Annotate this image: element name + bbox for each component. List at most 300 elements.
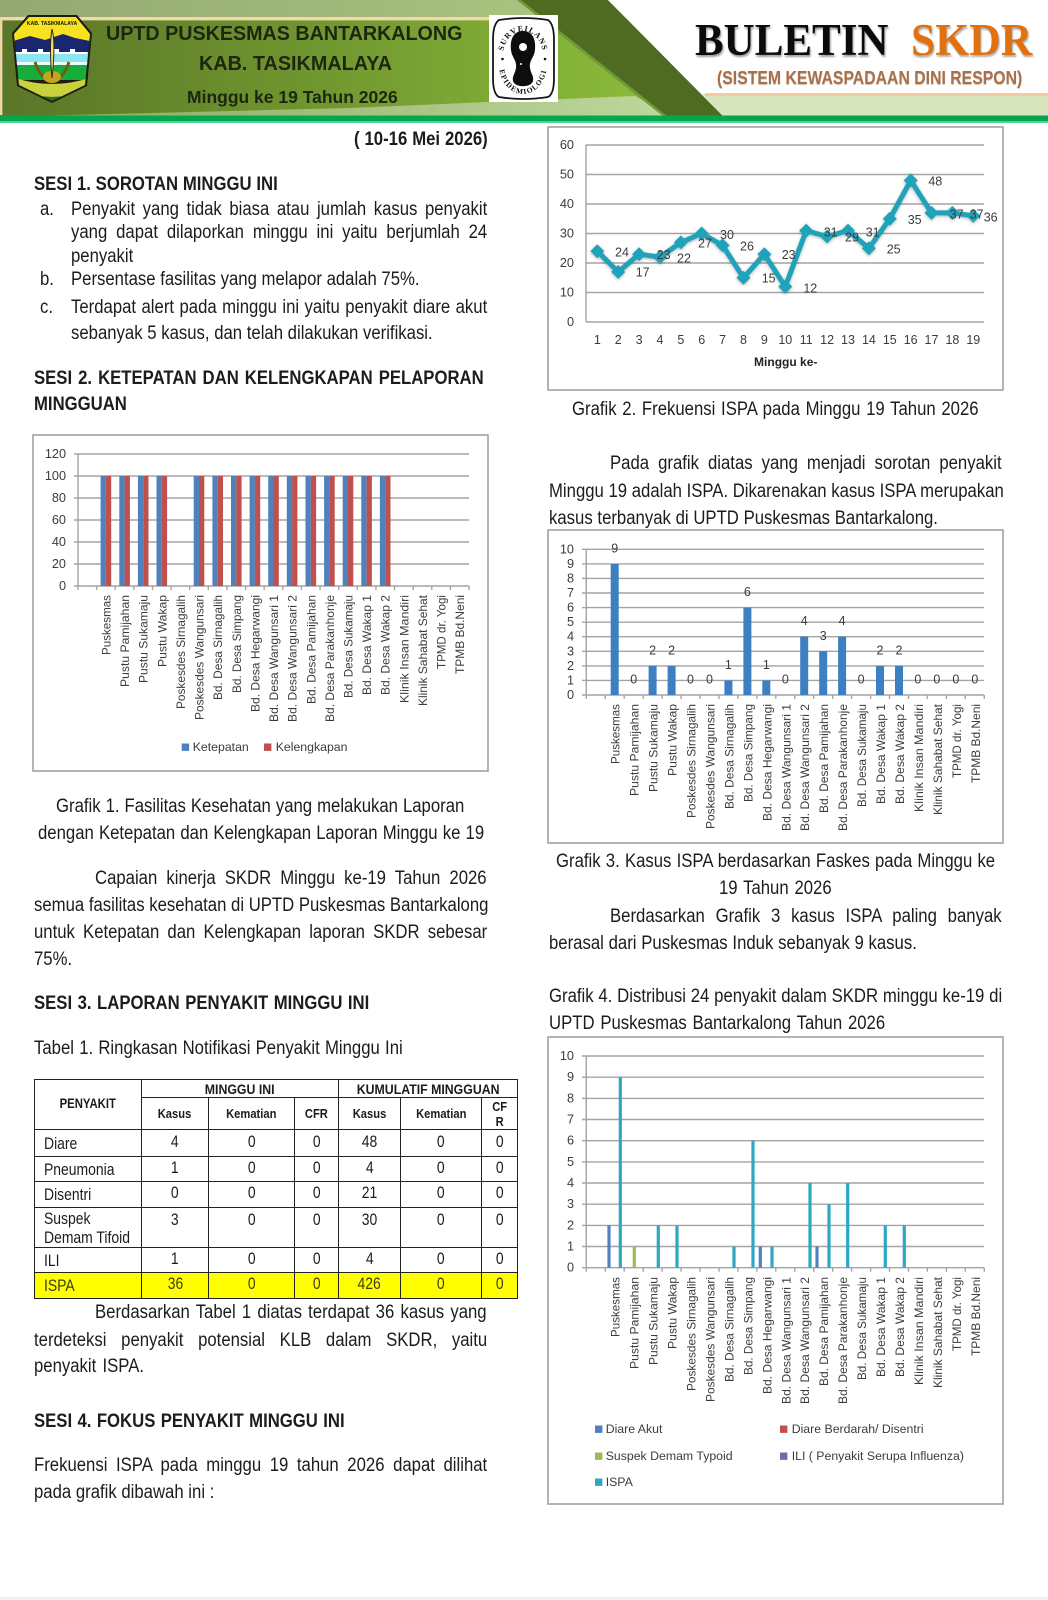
category labels: Pustu Sukamaju xyxy=(137,595,151,683)
data labels: 31 xyxy=(866,225,880,239)
category labels: Pustu Wakap xyxy=(155,595,169,667)
legend: ISPA xyxy=(606,1475,634,1489)
data labels: 0 xyxy=(858,672,865,686)
category labels: Bd. Desa Sukamaju xyxy=(855,704,869,807)
y axis labels: 10 xyxy=(560,1049,574,1063)
y axis labels: 1 xyxy=(567,673,574,687)
table: ringkasan notifikasi penyakit: 0 xyxy=(248,1248,255,1268)
caption: grafik 1 xyxy=(38,796,484,844)
caption: grafik 4: UPTD Puskesmas Bantarkalong Tahun 2026 xyxy=(549,1013,885,1034)
category labels: Puskesmas xyxy=(99,595,113,655)
chart: grafik 4 distribusi penyakit xyxy=(547,1036,1004,1505)
caption: grafik 3 xyxy=(556,851,995,899)
category labels: Klinik Insan Mandiri xyxy=(912,704,926,812)
text block: frekuensi ISPA xyxy=(34,1455,488,1503)
category labels: Bd. Desa Sirnagalih xyxy=(211,595,225,700)
x axis labels: 3 xyxy=(636,333,643,347)
table: ringkasan notifikasi penyakit: Kasus xyxy=(158,1106,192,1121)
table: ringkasan notifikasi penyakit: 0 xyxy=(248,1183,255,1202)
bars: diare akut xyxy=(607,1225,819,1268)
x axis labels: 2 xyxy=(615,333,622,347)
chart: grafik 1 ketepatan dan kelengkapan xyxy=(32,434,489,772)
category labels: Bd. Desa Parakanhonje xyxy=(836,704,850,831)
y axis labels: 60 xyxy=(560,138,574,152)
title: BULETIN SKDR: BULETIN xyxy=(695,15,888,65)
category labels: Bd. Desa Wakap 2 xyxy=(893,1277,907,1377)
caption: grafik 1: Grafik 1. Fasilitas Kesehatan yang melakukan Laporan xyxy=(56,796,464,817)
table: ringkasan notifikasi penyakit: 0 xyxy=(313,1158,320,1176)
category labels: Puskesmas xyxy=(609,1277,623,1337)
x axis labels: 7 xyxy=(719,333,726,347)
category labels: Pustu Wakap xyxy=(666,1277,680,1349)
title: BULETIN SKDR xyxy=(695,15,1034,65)
table: ringkasan notifikasi penyakit: 0 xyxy=(437,1132,445,1150)
y axis labels xyxy=(560,1049,574,1275)
heading: sesi 2 xyxy=(34,368,484,415)
category labels: Bd. Desa Wangunsari 2 xyxy=(286,595,300,722)
x axis labels: 1 xyxy=(594,333,601,347)
y axis labels: 6 xyxy=(567,1134,574,1148)
data labels: 0 xyxy=(933,672,940,686)
table: ringkasan notifikasi penyakit: 0 xyxy=(248,1132,255,1150)
text block: frekuensi ISPA: pada grafik dibawah ini : xyxy=(34,1482,214,1503)
table: ringkasan notifikasi penyakit: CF xyxy=(492,1098,507,1114)
line series xyxy=(597,180,973,287)
table: ringkasan notifikasi penyakit: Disentri xyxy=(44,1185,91,1204)
table: ringkasan notifikasi penyakit: 0 xyxy=(437,1183,445,1202)
data labels: 0 xyxy=(952,672,959,686)
category labels: Pustu Sukamaju xyxy=(647,1277,661,1365)
category labels: Bd. Desa Pamijahan xyxy=(304,595,318,704)
x axis labels: 18 xyxy=(945,333,959,347)
y axis labels: 120 xyxy=(45,447,66,461)
category labels: TPMB Bd.Neni xyxy=(969,704,983,783)
category labels: Klinik Sahabat Sehat xyxy=(931,1276,945,1388)
chart: grafik 3 kasus ISPA per faskes xyxy=(547,529,1004,844)
data labels: 0 xyxy=(971,672,978,686)
legend: Diare Berdarah/ Disentri xyxy=(792,1422,924,1436)
y axis labels: 10 xyxy=(560,542,574,556)
category labels: Klinik Sahabat Sehat xyxy=(416,594,430,706)
table: ringkasan notifikasi penyakit: KUMULATIF MINGGUAN xyxy=(357,1080,499,1096)
y axis labels: 7 xyxy=(567,586,574,600)
data labels: 27 xyxy=(698,236,712,250)
text block: sesi 1 list: yang dapat dilaporkan minggu ini yaitu berjumlah 24 xyxy=(71,222,487,243)
table: ringkasan notifikasi penyakit: 0 xyxy=(171,1183,179,1202)
category labels: Pustu Pamijahan xyxy=(628,1277,642,1369)
header title lines: KAB. TASIKMALAYA xyxy=(199,53,392,75)
table: ringkasan notifikasi penyakit: MINGGU INI xyxy=(205,1080,275,1096)
text block: sorotan ISPA: Minggu 19 adalah ISPA. Dikarenakan kasus ISPA merupakan xyxy=(549,481,1004,502)
data labels: 36 xyxy=(984,210,998,224)
header background shapes xyxy=(0,0,1048,123)
text block: sorotan ISPA: kasus terbanyak di UPTD Puskesmas Bantarkalong. xyxy=(549,508,938,529)
data labels: 2 xyxy=(877,643,884,657)
table: ringkasan notifikasi penyakit: 1 xyxy=(171,1158,179,1176)
table title: Tabel 1. Ringkasan Notifikasi Penyakit Minggu Ini xyxy=(34,1038,403,1059)
data labels: 15 xyxy=(762,272,776,286)
table: ringkasan notifikasi penyakit: 0 xyxy=(496,1132,503,1150)
category labels: Bd. Desa Wakap 1 xyxy=(360,595,374,695)
category labels: Bd. Desa Wangunsari 1 xyxy=(779,1277,793,1404)
data labels xyxy=(615,174,998,296)
data labels: 29 xyxy=(845,231,859,245)
bars: ISPA xyxy=(619,1077,906,1268)
logo: Surveilans Epidemiologi: EPIDEMIOLOGI xyxy=(499,68,546,94)
table: ringkasan notifikasi penyakit: Kasus xyxy=(353,1106,386,1121)
category labels: Bd. Desa Hegarwangi xyxy=(760,1277,774,1394)
text block: sesi 1 list: c. xyxy=(40,297,53,318)
text block: berdasarkan grafik 3: berasal dari Puskesmas Induk sebanyak 9 kasus. xyxy=(549,933,917,954)
subtitle: (SISTEM KEWASPADAAN DINI RESPON) xyxy=(717,68,1022,88)
legend: ILI ( Penyakit Serupa Influenza) xyxy=(792,1449,964,1463)
data labels: 37 xyxy=(970,207,984,221)
header title lines: Minggu ke 19 Tahun 2026 xyxy=(187,87,398,107)
y axis labels: 3 xyxy=(567,644,574,658)
data labels: 35 xyxy=(908,213,922,227)
category labels: Poskesdes Sirnagalih xyxy=(684,1277,698,1391)
data labels: 24 xyxy=(615,245,629,259)
x axis labels: 12 xyxy=(820,333,834,347)
table: ringkasan notifikasi penyakit: 0 xyxy=(496,1210,503,1229)
category labels: Bd. Desa Hegarwangi xyxy=(248,595,262,712)
category labels: Bd. Desa Sukamaju xyxy=(342,595,356,698)
table: ringkasan notifikasi penyakit: 0 xyxy=(437,1158,445,1176)
x axis labels xyxy=(594,333,980,347)
table: ringkasan notifikasi penyakit: Kematian xyxy=(416,1106,466,1121)
category labels: Bd. Desa Wangunsari 2 xyxy=(798,1277,812,1404)
category labels: Bd. Desa Simpang xyxy=(230,595,244,693)
y axis labels xyxy=(560,138,574,329)
category labels xyxy=(609,703,983,831)
data labels: 1 xyxy=(763,658,770,672)
table: ringkasan notifikasi penyakit: CFR xyxy=(305,1106,328,1121)
y axis labels: 100 xyxy=(45,469,66,483)
table: ringkasan notifikasi penyakit: 0 xyxy=(496,1158,503,1176)
text block: capaian kinerja xyxy=(34,868,488,970)
category labels: Bd. Desa Wakap 2 xyxy=(893,704,907,804)
table: ringkasan notifikasi penyakit: 0 xyxy=(248,1158,255,1176)
data labels: 1 xyxy=(725,658,732,672)
data labels: 2 xyxy=(649,643,656,657)
y axis labels: 8 xyxy=(567,571,574,585)
category labels: TPMD dr. Yogi xyxy=(435,595,449,669)
y axis labels: 30 xyxy=(560,226,574,240)
text block: capaian kinerja: 75%. xyxy=(34,949,72,970)
data labels: 6 xyxy=(744,585,751,599)
y axis labels: 40 xyxy=(560,197,574,211)
data labels: 31 xyxy=(824,225,838,239)
y axis labels: 60 xyxy=(52,513,66,527)
table: ringkasan notifikasi penyakit: 21 xyxy=(362,1183,377,1202)
caption: grafik 4: Grafik 4. Distribusi 24 penyakit dalam SKDR minggu ke-19 di xyxy=(549,986,1002,1007)
legend: Diare Akut xyxy=(606,1422,663,1436)
table: ringkasan notifikasi penyakit: Demam Tifoid xyxy=(44,1228,130,1246)
caption: grafik 3: Grafik 3. Kasus ISPA berdasarkan Faskes pada Minggu ke xyxy=(556,851,995,872)
logo: Surveilans Epidemiologi: SURVEILANS xyxy=(498,26,548,50)
heading: sesi 3: SESI 3. LAPORAN PENYAKIT MINGGU INI xyxy=(34,993,369,1014)
heading: sesi 2: SESI 2. KETEPATAN DAN KELENGKAPAN PELAPORAN xyxy=(34,368,484,389)
data labels: 0 xyxy=(782,672,789,686)
logo: Kabupaten Tasikmalaya shield xyxy=(12,15,92,103)
text block: sesi 1 list: Persentase fasilitas yang melapor adalah 75%. xyxy=(71,269,420,290)
y axis labels: 2 xyxy=(567,659,574,673)
category labels: Bd. Desa Parakanhonje xyxy=(323,595,337,722)
data labels: 9 xyxy=(611,541,618,555)
category labels: Bd. Desa Parakanhonje xyxy=(836,1277,850,1404)
chart: grafik 2 frekuensi ISPA xyxy=(547,126,1004,391)
text block: berdasarkan tabel 1 xyxy=(34,1302,487,1377)
table: ringkasan notifikasi penyakit: R xyxy=(495,1114,504,1128)
category labels: Klinik Insan Mandiri xyxy=(912,1277,926,1385)
data labels: 12 xyxy=(803,282,817,296)
data labels: 26 xyxy=(740,239,754,253)
x axis labels: 17 xyxy=(925,333,938,347)
x axis labels: 13 xyxy=(841,333,855,347)
category labels: Bd. Desa Simpang xyxy=(741,1277,755,1375)
table: ringkasan notifikasi penyakit: PENYAKIT xyxy=(60,1094,116,1110)
category labels: Bd. Desa Wangunsari 1 xyxy=(267,595,281,722)
table: ringkasan notifikasi penyakit: 0 xyxy=(313,1183,320,1202)
text block: sorotan ISPA: Pada grafik diatas yang menjadi sorotan penyakit xyxy=(610,453,1002,474)
data labels: 17 xyxy=(636,266,650,280)
caption: grafik 2: Grafik 2. Frekuensi ISPA pada Minggu 19 Tahun 2026 xyxy=(572,399,979,420)
header title lines: UPTD PUSKESMAS BANTARKALONG xyxy=(106,23,462,45)
table: ringkasan notifikasi penyakit: Suspek xyxy=(44,1208,90,1228)
text block: sesi 1 list: Penyakit yang tidak biasa atau jumlah kasus penyakit xyxy=(71,199,487,220)
table: ringkasan notifikasi penyakit: 4 xyxy=(171,1132,179,1150)
category labels: Poskesdes Wangunsari xyxy=(704,704,718,829)
bars: ketepatan xyxy=(101,476,385,586)
text block: sorotan ISPA xyxy=(549,453,1004,529)
text block: capaian kinerja: untuk Ketepatan dan Kelengkapan laporan SKDR sebesar xyxy=(34,922,487,943)
category labels: Klinik Insan Mandiri xyxy=(397,595,411,703)
y axis labels: 0 xyxy=(567,688,574,702)
title: BULETIN SKDR: SKDR xyxy=(911,15,1032,65)
heading: sesi 4: SESI 4. FOKUS PENYAKIT MINGGU INI xyxy=(34,1411,345,1432)
table: ringkasan notifikasi penyakit: 426 xyxy=(358,1274,381,1293)
category labels: TPMD dr. Yogi xyxy=(950,1277,964,1351)
legend xyxy=(595,1422,964,1489)
table: ringkasan notifikasi penyakit: Diare xyxy=(44,1134,77,1152)
x axis labels: 6 xyxy=(698,333,705,347)
data labels: 48 xyxy=(928,174,942,188)
table: ringkasan notifikasi penyakit: 0 xyxy=(313,1274,320,1293)
legend: Suspek Demam Typoid xyxy=(606,1449,733,1463)
logo: Kabupaten Tasikmalaya shield: KAB. TASIKMALAYA xyxy=(27,21,78,27)
y axis labels: 0 xyxy=(567,1261,574,1275)
legend: Kelengkapan xyxy=(276,740,348,754)
y axis labels: 2 xyxy=(567,1218,574,1232)
y axis labels: 20 xyxy=(52,557,66,571)
y axis labels: 8 xyxy=(567,1091,574,1105)
table: ringkasan notifikasi penyakit: 4 xyxy=(366,1158,373,1176)
category labels: Bd. Desa Sirnagalih xyxy=(722,704,736,809)
y axis labels: 4 xyxy=(567,1176,574,1190)
heading: sesi 1: SESI 1. SOROTAN MINGGU INI xyxy=(34,174,278,195)
y axis labels: 3 xyxy=(567,1197,574,1211)
legend: Ketepatan xyxy=(193,740,249,754)
text block: frekuensi ISPA: Frekuensi ISPA pada minggu 19 tahun 2026 dapat dilihat xyxy=(34,1455,487,1476)
bars: suspek demam typoid xyxy=(633,1246,636,1268)
text block: berdasarkan grafik 3: Berdasarkan Grafik 3 kasus ISPA paling banyak xyxy=(610,906,1002,927)
category labels: Poskesdes Wangunsari xyxy=(704,1277,718,1402)
text block: sesi 1 list xyxy=(40,199,488,344)
table: ringkasan notifikasi penyakit: Kematian xyxy=(226,1106,277,1121)
text block: capaian kinerja: semua fasilitas kesehatan di UPTD Puskesmas Bantarkalong xyxy=(34,895,488,916)
x axis labels: 9 xyxy=(761,333,768,347)
y axis labels: 7 xyxy=(567,1112,574,1126)
text block: sesi 1 list: sebanyak 5 kasus, dan telah dilakukan verifikasi. xyxy=(71,323,433,344)
category labels: Pustu Sukamaju xyxy=(647,704,661,792)
y axis labels: 0 xyxy=(567,315,574,329)
logo: Surveilans Epidemiologi xyxy=(489,15,558,102)
table: ringkasan notifikasi penyakit: 1 xyxy=(171,1248,179,1268)
text block: berdasarkan tabel 1: terdeteksi penyakit potensial KLB dalam SKDR, yaitu xyxy=(34,1330,487,1351)
category labels: Bd. Desa Sukamaju xyxy=(855,1277,869,1380)
category labels: Bd. Desa Hegarwangi xyxy=(760,704,774,821)
y axis labels: 5 xyxy=(567,615,574,629)
data labels: 25 xyxy=(887,243,901,257)
data labels: 22 xyxy=(677,251,691,265)
x axis labels: 5 xyxy=(677,333,684,347)
y axis labels: 50 xyxy=(560,168,574,182)
table: ringkasan notifikasi penyakit: Pneumonia xyxy=(44,1160,115,1178)
table: ringkasan notifikasi penyakit: 0 xyxy=(313,1210,320,1229)
table: ringkasan notifikasi penyakit: 0 xyxy=(313,1248,320,1268)
category labels: Bd. Desa Wakap 2 xyxy=(379,595,393,695)
caption: grafik 4 xyxy=(549,986,1002,1034)
table: ringkasan notifikasi penyakit: 0 xyxy=(248,1210,255,1229)
category labels xyxy=(609,1276,983,1404)
y axis labels: 9 xyxy=(567,557,574,571)
data labels: 3 xyxy=(820,629,827,643)
legend xyxy=(182,740,348,754)
table: ringkasan notifikasi penyakit: 0 xyxy=(496,1183,503,1202)
table: ringkasan notifikasi penyakit: 36 xyxy=(167,1274,183,1293)
text block: berdasarkan tabel 1: Berdasarkan Tabel 1 diatas terdapat 36 kasus yang xyxy=(95,1302,487,1323)
y axis labels: 1 xyxy=(567,1240,574,1254)
x axis title: Minggu ke- xyxy=(754,355,817,369)
y axis labels: 4 xyxy=(567,630,574,644)
table: ringkasan notifikasi penyakit xyxy=(34,1079,518,1299)
date range: ( 10-16 Mei 2026) xyxy=(354,129,488,150)
y axis labels: 10 xyxy=(560,286,574,300)
header banner xyxy=(0,0,1048,123)
y axis labels: 6 xyxy=(567,601,574,615)
text block: sesi 1 list: penyakit xyxy=(71,246,133,267)
category labels: Bd. Desa Wangunsari 1 xyxy=(779,704,793,831)
y axis labels: 20 xyxy=(560,256,574,270)
table: ringkasan notifikasi penyakit: 0 xyxy=(248,1274,255,1293)
category labels: TPMB Bd.Neni xyxy=(453,595,467,674)
table: ringkasan notifikasi penyakit: 48 xyxy=(362,1132,377,1150)
text block: capaian kinerja: Capaian kinerja SKDR Minggu ke-19 Tahun 2026 xyxy=(95,868,487,889)
data labels: 0 xyxy=(706,672,713,686)
y axis labels: 40 xyxy=(52,535,66,549)
category labels: Bd. Desa Pamijahan xyxy=(817,704,831,813)
category labels: Puskesmas xyxy=(609,704,623,764)
y axis labels xyxy=(45,447,66,593)
category labels: Bd. Desa Wakap 1 xyxy=(874,704,888,804)
table: ringkasan notifikasi penyakit: 0 xyxy=(437,1210,445,1229)
category labels: TPMB Bd.Neni xyxy=(969,1277,983,1356)
x axis labels: 10 xyxy=(778,333,792,347)
x axis labels: 11 xyxy=(800,333,813,347)
text block: berdasarkan tabel 1: penyakit ISPA. xyxy=(34,1356,144,1377)
category labels: Bd. Desa Sirnagalih xyxy=(722,1277,736,1382)
category labels: Pustu Pamijahan xyxy=(628,704,642,796)
table: ringkasan notifikasi penyakit: ISPA xyxy=(44,1276,75,1295)
category labels: Bd. Desa Wakap 1 xyxy=(874,1277,888,1377)
caption: grafik 3: 19 Tahun 2026 xyxy=(719,878,832,899)
header title lines xyxy=(106,23,462,107)
x axis labels: 4 xyxy=(657,333,664,347)
text block: sesi 1 list: b. xyxy=(40,269,54,290)
bars xyxy=(611,564,903,695)
data labels: 4 xyxy=(801,614,808,628)
data labels: 4 xyxy=(839,614,846,628)
data labels: 0 xyxy=(630,672,637,686)
data labels: 0 xyxy=(687,672,694,686)
table: ringkasan notifikasi penyakit: 0 xyxy=(437,1248,445,1268)
heading: sesi 2: MINGGUAN xyxy=(34,394,127,415)
table: ringkasan notifikasi penyakit: 0 xyxy=(496,1274,503,1293)
bars: kelengkapan xyxy=(106,476,391,586)
data labels: 2 xyxy=(668,643,675,657)
table: ringkasan notifikasi penyakit: 0 xyxy=(313,1132,320,1150)
x axis labels: 15 xyxy=(883,333,897,347)
table: ringkasan notifikasi penyakit: 0 xyxy=(437,1274,445,1293)
category labels: TPMD dr. Yogi xyxy=(950,704,964,778)
x axis labels: 14 xyxy=(862,333,876,347)
category labels: Poskesdes Wangunsari xyxy=(192,595,206,720)
y axis labels xyxy=(560,542,574,702)
y axis labels: 9 xyxy=(567,1070,574,1084)
x axis labels: 8 xyxy=(740,333,747,347)
category labels: Pustu Wakap xyxy=(666,704,680,776)
table: ringkasan notifikasi penyakit: 4 xyxy=(366,1248,373,1268)
data labels: 0 xyxy=(914,672,921,686)
x axis labels: 19 xyxy=(966,333,980,347)
data labels: 2 xyxy=(896,643,903,657)
category labels xyxy=(99,594,467,722)
table: ringkasan notifikasi penyakit: 3 xyxy=(171,1210,179,1229)
data labels: 23 xyxy=(657,248,671,262)
y axis labels: 80 xyxy=(52,491,66,505)
data labels: 37 xyxy=(950,207,964,221)
data labels xyxy=(611,541,978,686)
y axis labels: 5 xyxy=(567,1155,574,1169)
category labels: Bd. Desa Wangunsari 2 xyxy=(798,704,812,831)
data labels: 30 xyxy=(720,228,734,242)
category labels: Pustu Pamijahan xyxy=(118,595,132,687)
table: ringkasan notifikasi penyakit: 0 xyxy=(496,1248,503,1268)
category labels: Bd. Desa Pamijahan xyxy=(817,1277,831,1386)
x axis labels: 16 xyxy=(904,333,918,347)
category labels: Poskesdes Sirnagalih xyxy=(684,704,698,818)
text block: sesi 1 list: a. xyxy=(40,199,54,220)
text block: berdasarkan grafik 3 xyxy=(549,906,1002,954)
table: ringkasan notifikasi penyakit: ILI xyxy=(44,1250,60,1270)
category labels: Bd. Desa Simpang xyxy=(741,704,755,802)
category labels: Poskesdes Sirnagalih xyxy=(174,595,188,709)
text block: sesi 1 list: Terdapat alert pada minggu ini yaitu penyakit diare akut xyxy=(71,297,487,318)
category labels: Klinik Sahabat Sehat xyxy=(931,703,945,815)
y axis labels: 0 xyxy=(59,579,66,593)
table: ringkasan notifikasi penyakit: 30 xyxy=(362,1210,377,1229)
data labels: 23 xyxy=(782,248,796,262)
